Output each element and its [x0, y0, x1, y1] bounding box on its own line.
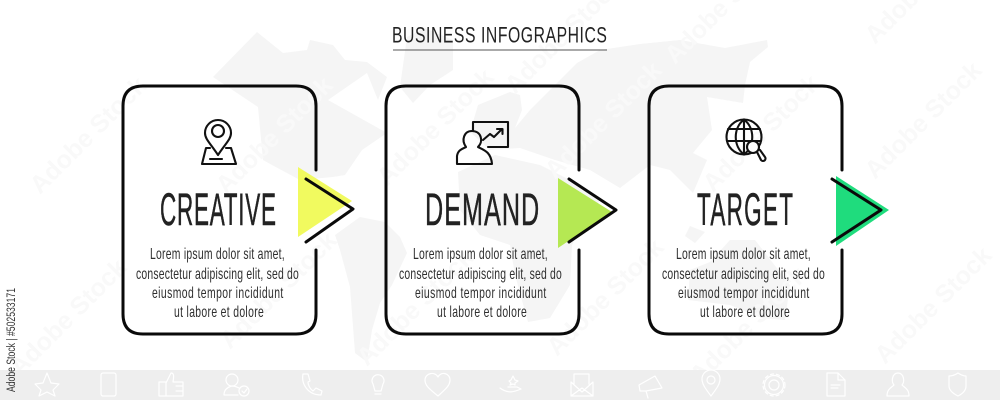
watermark: Adobe Stock [371, 63, 499, 191]
panel: demand [386, 86, 616, 334]
body text: ut labore et dolore [174, 303, 264, 321]
icon: bulb [372, 375, 384, 394]
watermark: Adobe Stock [210, 71, 338, 199]
body text: Lorem ipsum dolor sit amet, [676, 245, 811, 263]
watermark: Adobe Stock [351, 243, 479, 371]
body text [399, 245, 562, 321]
body text: ut labore et dolore [700, 303, 790, 321]
icon: globe with magnifier [726, 120, 766, 161]
watermark: Adobe Stock [684, 261, 812, 389]
bottom icon strip [0, 370, 1000, 400]
body text: Lorem ipsum dolor sit amet, [413, 245, 548, 263]
watermark: Adobe Stock [24, 71, 152, 199]
icon: document [827, 373, 845, 396]
heading: TARGET [697, 185, 793, 235]
stock id label: Adobe Stock | #502533171 [6, 288, 18, 392]
body text: consectetur adipiscing elit, sed do [662, 265, 825, 283]
body text: Lorem ipsum dolor sit amet, [150, 245, 285, 263]
arrow [832, 176, 889, 246]
body text: ut labore et dolore [437, 303, 527, 321]
icon: hand with star [500, 376, 521, 392]
body text [136, 245, 299, 321]
card outline [649, 86, 842, 334]
card outline [123, 86, 316, 334]
watermark: Adobe Stock [214, 226, 342, 354]
icon: location pin [702, 370, 720, 396]
watermark: Adobe Stock [697, 69, 825, 197]
icon: map pin [202, 120, 236, 164]
icon: user check [224, 374, 249, 396]
arrow [298, 167, 353, 242]
body text: eiusmod tempor incididunt [152, 284, 284, 302]
icon: presenter with chart [457, 122, 508, 164]
background world map [213, 28, 790, 362]
heading: DEMAND [425, 184, 539, 235]
body text: consectetur adipiscing elit, sed do [136, 265, 299, 283]
arrow [558, 178, 616, 248]
body text: eiusmod tempor incididunt [678, 284, 810, 302]
title: BUSINESS INFOGRAPHICS [392, 23, 607, 48]
icon: thumbs up [159, 373, 183, 396]
watermark: Adobe Stock [4, 253, 132, 381]
body text [662, 245, 825, 321]
icon: shield [949, 373, 966, 396]
icon: envelope [571, 374, 593, 396]
card outline [386, 86, 579, 334]
icon: star [35, 373, 59, 396]
icon: phone device [101, 373, 116, 396]
icon: person [887, 373, 909, 396]
body text: eiusmod tempor incididunt [415, 284, 547, 302]
panel: creative [123, 86, 353, 334]
icon: gear [763, 374, 785, 396]
panel: target [649, 86, 889, 334]
icon: heart [425, 373, 450, 396]
watermark: Adobe Stock [859, 56, 987, 184]
body text: consectetur adipiscing elit, sed do [399, 265, 562, 283]
watermark: Adobe Stock [869, 241, 997, 369]
watermark: Adobe Stock [541, 233, 669, 361]
icon: megaphone [639, 376, 662, 398]
heading: CREATIVE [160, 185, 276, 235]
watermark: Adobe Stock [539, 56, 667, 184]
icon: phone [303, 374, 322, 395]
